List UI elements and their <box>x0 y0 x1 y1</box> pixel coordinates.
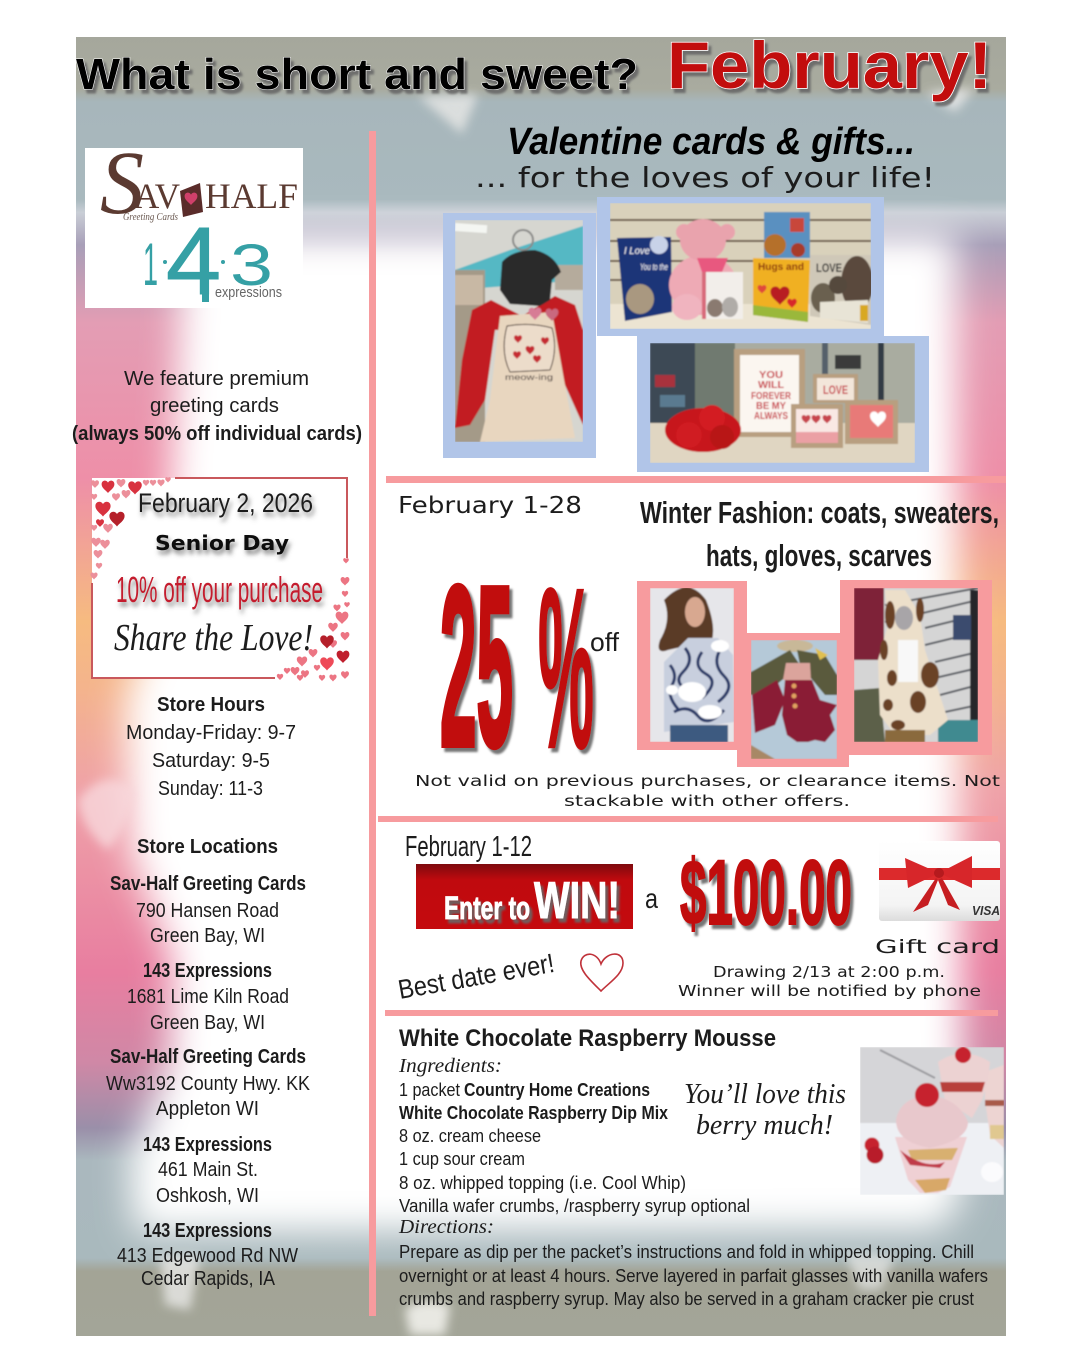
location: Lime Kiln Road: 143 Expressions <box>143 960 272 982</box>
icon: gift card: VISA <box>972 903 1000 918</box>
gift card label: Gift card <box>875 936 1000 958</box>
store locations: Store Locations <box>137 836 278 858</box>
photo: love signs and red flowers: ALWAYS <box>754 411 788 422</box>
logo: 143 expressions <box>143 208 282 315</box>
photo: pink bear and books: Hugs and <box>758 262 804 273</box>
location: Oshkosh: Oshkosh, WI <box>156 1185 259 1207</box>
icon: gift card <box>879 841 1000 921</box>
senior day card: 10% off your purchase <box>116 569 323 610</box>
divider: top <box>386 476 1006 483</box>
ingredients: 8 oz. whipped topping (i.e. Cool Whip) <box>399 1173 686 1193</box>
directions: Directions: <box>398 1216 494 1238</box>
photo: pink bear and books: I Love <box>624 246 650 257</box>
photo: love signs and red flowers: WILL <box>758 380 784 391</box>
photo: love signs and red flowers: BE MY <box>756 401 786 412</box>
photo: love signs and red flowers: YOU <box>759 370 783 381</box>
drawing details <box>678 963 981 1000</box>
photo: love signs and red flowers <box>637 336 929 472</box>
store hours: Store Hours <box>157 694 265 716</box>
logo: Sav-Half: S <box>100 134 144 233</box>
store hours <box>126 694 296 800</box>
location: Oshkosh <box>143 1134 272 1207</box>
tagline: berry much! <box>696 1110 833 1141</box>
tagline <box>684 1079 846 1141</box>
location: Hansen Road <box>110 873 306 947</box>
logo: Sav-Half <box>100 134 298 233</box>
photo: love signs and red flowers: LOVE <box>823 383 848 397</box>
ingredients: 1 packet <box>399 1080 460 1100</box>
title: question: What is short and sweet? <box>76 50 638 99</box>
drawing details: Drawing 2/13 at 2:00 p.m. <box>713 963 945 981</box>
enter to win banner <box>416 864 633 930</box>
senior day card <box>90 477 350 682</box>
location: Hansen Road: Green Bay, WI <box>150 925 265 947</box>
section: recipe <box>398 1025 1004 1309</box>
location: Oshkosh: 461 Main St. <box>158 1159 258 1181</box>
ingredients: Ingredients: <box>398 1055 502 1077</box>
location: Oshkosh: 143 Expressions <box>143 1134 272 1156</box>
sale fine print <box>415 772 1000 810</box>
location: Appleton: Ww3192 County Hwy. KK <box>106 1073 311 1095</box>
store hours: Saturday: 9-5 <box>152 750 270 772</box>
ingredients: White Chocolate Raspberry Dip Mix <box>399 1103 668 1123</box>
directions: crumbs and raspberry syrup. May also be served in a graham cracker pie crust <box>399 1289 974 1309</box>
location: Lime Kiln Road: 1681 Lime Kiln Road <box>127 986 289 1008</box>
directions <box>398 1216 988 1309</box>
valentine heading: Valentine cards & gifts... <box>507 121 915 163</box>
hearts: top left corner <box>90 477 171 580</box>
title: February: February! <box>667 28 992 102</box>
photo: pink bear and books: You to the <box>640 262 668 272</box>
logo panel <box>85 134 303 315</box>
location: Lime Kiln Road: Green Bay, WI <box>150 1012 265 1034</box>
location: Hansen Road: Sav-Half Greeting Cards <box>110 873 306 895</box>
section: winter fashion sale: % <box>538 542 594 796</box>
store hours: Sunday: 11-3 <box>158 778 263 800</box>
location: Cedar Rapids: Cedar Rapids, IA <box>141 1268 276 1290</box>
directions: overnight or at least 4 hours. Serve layered in parfait glasses with vanilla wafers <box>399 1266 988 1286</box>
icon: heart outline <box>581 954 623 991</box>
location: Cedar Rapids: 143 Expressions <box>143 1220 272 1242</box>
photo: red jacket and cat shirt <box>443 213 596 458</box>
recipe title: White Chocolate Raspberry Mousse <box>399 1025 776 1052</box>
photo: patterned sweater <box>637 581 747 750</box>
tagline: You’ll love this <box>684 1079 846 1110</box>
best date text: Best date ever! <box>396 948 557 1005</box>
location: Appleton <box>106 1046 311 1120</box>
ingredients: 1 cup sour cream <box>399 1149 525 1169</box>
sale fine print: stackable with other offers. <box>564 792 850 810</box>
directions: Prepare as dip per the packet’s instructions and fold in whipped topping. Chill <box>399 1242 974 1262</box>
valentine heading <box>475 121 935 194</box>
enter to win banner: Enter to <box>444 890 530 926</box>
enter to win banner: WIN! <box>534 872 620 930</box>
location: Hansen Road: 790 Hansen Road <box>136 900 279 922</box>
sale dates: February 1-28 <box>398 493 582 519</box>
store locations <box>106 836 311 1290</box>
senior day card: February 2, 2026 <box>138 488 313 518</box>
logo: 143 expressions: 3 <box>230 233 273 298</box>
store hours: Monday-Friday: 9-7 <box>126 722 296 744</box>
logo: 143 expressions: 4 <box>166 208 221 315</box>
intro text: We feature premium <box>124 368 309 390</box>
photo: pink bear and books: LOVE <box>816 261 842 275</box>
ingredients: 8 oz. cream cheese <box>399 1126 541 1146</box>
title <box>76 28 992 102</box>
section: winter fashion sale <box>398 493 1000 810</box>
location: Cedar Rapids: 413 Edgewood Rd NW <box>117 1245 298 1267</box>
logo: 143 expressions: 1 <box>143 231 158 298</box>
vertical divider <box>369 131 376 1316</box>
ingredients: Country Home Creations <box>464 1080 650 1100</box>
photo: raspberry parfait <box>860 1047 1004 1195</box>
intro text: (always 50% off individual cards) <box>72 423 362 445</box>
connector word: a <box>645 883 658 914</box>
intro text: greeting cards <box>150 395 279 417</box>
sale fine print: Not valid on previous purchases, or clearance items. Not <box>415 772 1000 790</box>
senior day card: Senior Day <box>155 531 289 555</box>
prize amount: $100.00 <box>680 842 852 944</box>
photo: pink bear and books <box>597 197 884 336</box>
logo: 143 expressions: expressions <box>215 284 282 301</box>
photo: red gloves <box>737 633 849 767</box>
location: Appleton: Appleton WI <box>156 1098 259 1120</box>
logo: Sav-Half: Greeting Cards <box>123 211 178 223</box>
location: Cedar Rapids <box>117 1220 298 1290</box>
photo: love signs and red flowers: FOREVER <box>751 391 792 402</box>
photo: red jacket and cat shirt: meow-ing <box>505 373 553 382</box>
intro text <box>72 368 362 445</box>
winter fashion heading <box>640 495 999 573</box>
winter fashion heading: hats, gloves, scarves <box>706 538 932 573</box>
location: Appleton: Sav-Half Greeting Cards <box>110 1046 306 1068</box>
logo: Sav-Half: HALF <box>205 176 298 216</box>
photo: cow print jacket <box>840 580 992 755</box>
ingredients <box>398 1055 750 1216</box>
drawing details: Winner will be notified by phone <box>678 982 981 1000</box>
25 percent off: off <box>590 627 620 657</box>
giveaway dates: February 1-12 <box>405 831 532 863</box>
senior day card: Share the Love! <box>114 617 313 659</box>
divider: bottom <box>385 1010 998 1016</box>
hearts: bottom right corner <box>277 558 350 682</box>
location: Lime Kiln Road <box>127 960 289 1034</box>
25 percent off: 25 <box>440 540 513 794</box>
section: gift card giveaway <box>396 831 1000 1005</box>
ingredients: Vanilla wafer crumbs, /raspberry syrup optional <box>399 1196 750 1216</box>
logo: Sav-Half: AV <box>134 176 180 216</box>
valentine heading: ... for the loves of your life! <box>475 161 935 194</box>
divider: middle <box>378 816 998 822</box>
